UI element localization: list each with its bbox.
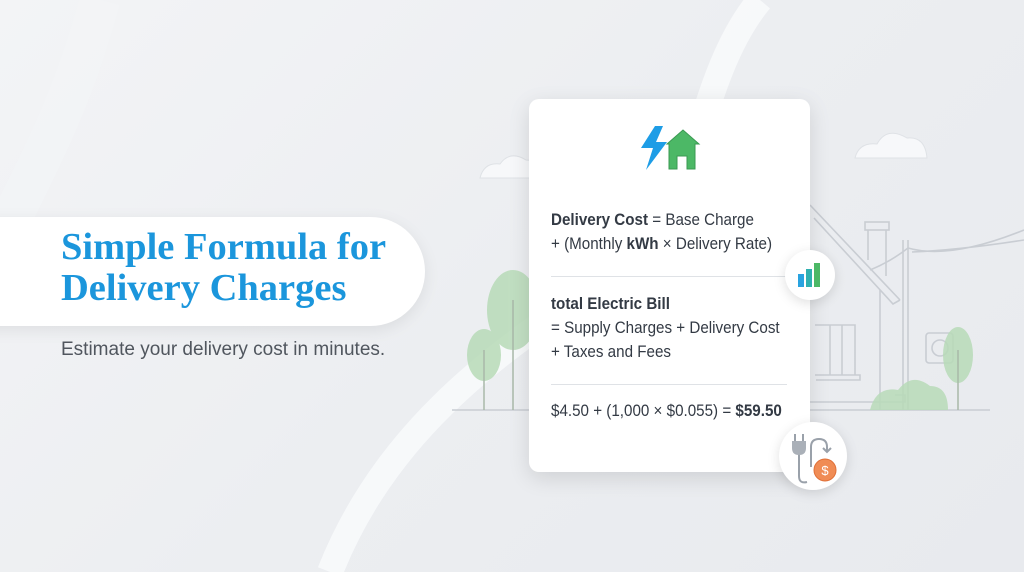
formula: total bill: total Electric Bill xyxy=(551,295,670,313)
title: Delivery Charges xyxy=(61,267,346,309)
title: Simple Formula for xyxy=(61,226,386,268)
icon: bar chart xyxy=(785,250,835,300)
title pill xyxy=(0,217,425,326)
title xyxy=(61,226,386,309)
formula card: = Supply Charges + Delivery Cost xyxy=(551,319,780,337)
formula: delivery cost: Delivery Cost = Base Charge xyxy=(551,211,754,229)
icon: bolt and house xyxy=(641,126,700,170)
icon: plug with coin xyxy=(779,422,847,490)
example calculation: $4.50 + (1,000 × $0.055) = $59.50 xyxy=(551,402,782,420)
formula card xyxy=(529,99,810,472)
formula card: + Taxes and Fees xyxy=(551,343,671,361)
subtitle: Estimate your delivery cost in minutes. xyxy=(61,339,385,360)
icon: plug with coin: $ xyxy=(821,463,829,478)
formula card: + (Monthly kWh × Delivery Rate) xyxy=(551,235,772,253)
